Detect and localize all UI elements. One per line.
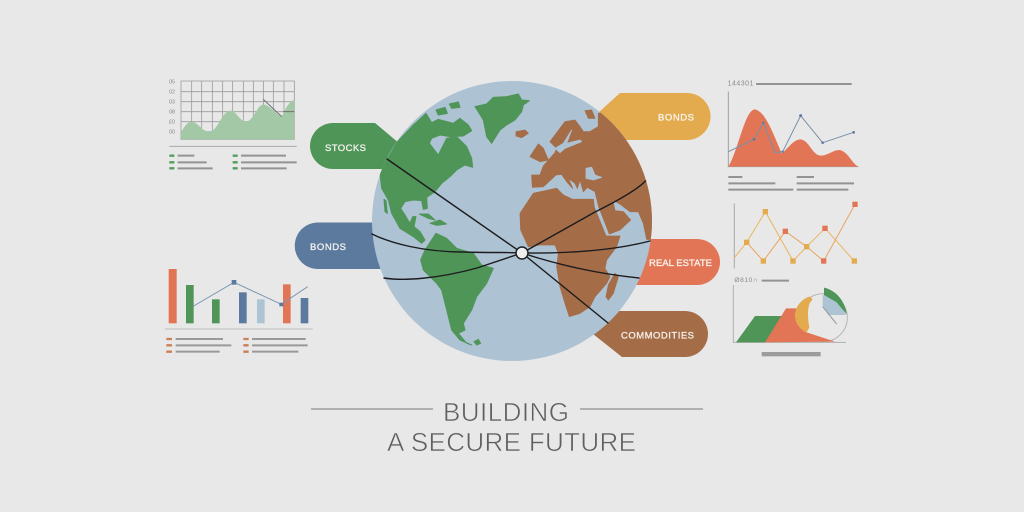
pill: stocks xyxy=(310,123,400,169)
axis labels: 00 xyxy=(169,129,175,135)
bars xyxy=(169,269,308,323)
axis labels: 05 xyxy=(169,80,175,86)
chart: area and pie xyxy=(733,277,847,356)
infographic canvas xyxy=(165,80,858,451)
green wedge xyxy=(824,288,847,314)
pill: bonds right: BONDS xyxy=(658,112,694,124)
text lines xyxy=(728,177,854,190)
divider xyxy=(169,145,297,148)
pill: real estate: REAL ESTATE xyxy=(649,258,712,269)
header rule xyxy=(762,278,789,284)
pill: real estate xyxy=(630,239,720,285)
pill: commodities: COMMODITIES xyxy=(621,330,694,342)
line with markers xyxy=(194,280,308,306)
pill: commodities xyxy=(593,311,708,357)
pill: bonds right xyxy=(590,93,710,140)
legend xyxy=(169,156,297,168)
chart label: 144301 xyxy=(728,81,753,88)
network hub xyxy=(516,247,528,259)
title line two: A SECURE FUTURE xyxy=(387,427,636,457)
title rule left xyxy=(311,408,433,410)
orange area xyxy=(728,109,858,167)
green area xyxy=(736,316,785,342)
chart: orange area with line xyxy=(728,81,858,190)
globe xyxy=(372,81,660,361)
baseline xyxy=(165,327,313,331)
axes xyxy=(728,92,858,167)
pill: stocks: STOCKS xyxy=(325,143,366,154)
axis labels: 03 xyxy=(169,99,175,105)
mixed line xyxy=(747,204,855,261)
markers xyxy=(744,202,858,264)
title rule right xyxy=(580,408,703,410)
title xyxy=(311,397,703,457)
blue wedge xyxy=(823,294,846,315)
axis labels: 02 xyxy=(169,89,175,95)
gray bar xyxy=(762,352,821,356)
chart: green area with grid xyxy=(169,80,297,168)
green area xyxy=(181,100,294,139)
axis labels: £0 xyxy=(169,119,175,125)
land: eurasia and africa xyxy=(516,107,660,317)
title line one: BUILDING xyxy=(443,397,569,427)
chart: zigzag lines xyxy=(734,202,858,268)
yellow line xyxy=(734,212,854,261)
globe ocean xyxy=(372,81,652,361)
orange area xyxy=(765,308,835,342)
pie pointer xyxy=(823,307,837,324)
pill: bonds left: BONDS xyxy=(310,242,346,253)
axis labels xyxy=(169,80,175,135)
legend xyxy=(166,339,308,352)
line with markers xyxy=(728,114,855,153)
chart label: Ø810∩ xyxy=(734,277,758,284)
network lines xyxy=(372,159,650,323)
grid xyxy=(181,81,294,139)
trend line xyxy=(263,99,294,117)
axis labels: 08 xyxy=(169,109,175,115)
pie outline xyxy=(799,294,847,342)
header rule xyxy=(756,81,852,87)
yellow wedge xyxy=(795,297,812,332)
pill: bonds left xyxy=(295,222,390,269)
chart: bars and line xyxy=(165,269,313,352)
axis xyxy=(733,203,736,268)
axes xyxy=(733,285,846,342)
land: americas xyxy=(380,94,529,345)
